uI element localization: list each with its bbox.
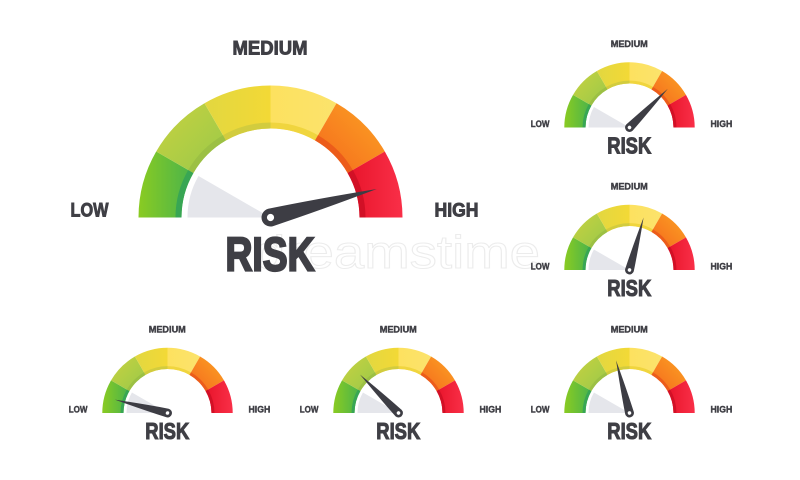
- small gauge: bottom left: [69, 324, 270, 444]
- label: medium: MEDIUM: [611, 39, 648, 49]
- label: low: LOW: [69, 405, 88, 415]
- label: high: HIGH: [711, 262, 732, 272]
- label: risk: RISK: [376, 418, 420, 444]
- main needle pointing to high: [259, 180, 379, 229]
- watermark: dreamstime: [255, 226, 540, 278]
- label: risk: RISK: [607, 133, 651, 159]
- small gauge: bottom centre: [300, 324, 501, 444]
- dial arc: [564, 205, 695, 270]
- label: low: LOW: [300, 405, 319, 415]
- label: high: HIGH: [249, 405, 270, 415]
- dial arc: [564, 62, 695, 128]
- needle: [612, 359, 635, 418]
- main dial arc: [138, 86, 402, 218]
- label: risk: RISK: [607, 275, 651, 301]
- label: low: LOW: [531, 262, 550, 272]
- dial arc: [333, 348, 464, 413]
- needle: [114, 395, 173, 418]
- label: medium: MEDIUM: [611, 324, 648, 334]
- label: high: HIGH: [711, 119, 732, 129]
- label: medium: MEDIUM: [380, 324, 417, 334]
- needle: [357, 371, 405, 419]
- label: risk: RISK: [607, 418, 651, 444]
- label: high: HIGH: [480, 405, 501, 415]
- dial arc: [564, 348, 695, 413]
- label: risk: RISK: [226, 228, 315, 280]
- label: high: HIGH: [434, 200, 478, 222]
- label: low: LOW: [70, 200, 109, 222]
- label: high: HIGH: [711, 405, 732, 415]
- label: low: LOW: [531, 405, 550, 415]
- needle: [624, 216, 648, 275]
- small gauge: middle right: [531, 181, 732, 301]
- dial arc: [102, 348, 233, 413]
- small gauge: bottom right: [531, 324, 732, 444]
- main gauge: risk: [70, 38, 478, 280]
- label: medium: MEDIUM: [232, 38, 308, 60]
- small gauge: top right: [531, 39, 732, 159]
- label: medium: MEDIUM: [149, 324, 186, 334]
- label: risk: RISK: [145, 418, 189, 444]
- needle: [623, 86, 671, 134]
- label: low: LOW: [531, 119, 550, 129]
- label: medium: MEDIUM: [611, 181, 648, 191]
